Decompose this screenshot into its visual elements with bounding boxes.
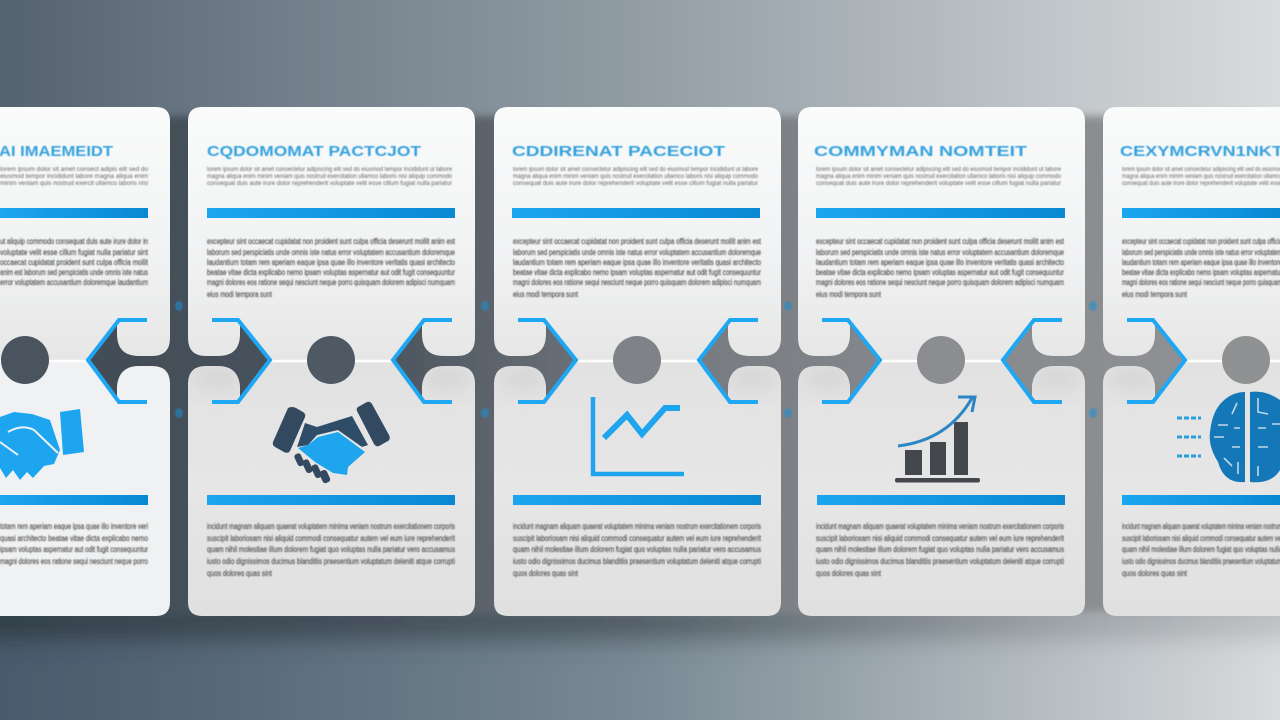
panel: card 5 (1103, 107, 1280, 616)
lower body text (816, 522, 1065, 578)
body text: occaecat cupidatat proident sunt culpa officia mollit (0, 258, 149, 267)
body text: magni dolores eos ratione sequi nesciunt neque porro quisquam dolorem adipisci numquam (513, 278, 761, 287)
lower body text (0, 522, 148, 566)
body text: beatae vitae dicta explicabo nemo ipsam voluptas aspernatur aut odit fugit consequuntur (513, 268, 761, 277)
heading: CEXYMCRVN1NKT (1120, 143, 1280, 160)
heading: AI IMAEMEIDT (0, 143, 113, 160)
icon: line chart (593, 397, 684, 474)
summary lines: magna aliqua enim minim veniam quis nostrud exercitation ullamco laboris nisi aliquip commodo (207, 173, 452, 180)
summary lines: consequat duis aute irure dolor reprehenderit voluptate velit esse cillum fugiat nulla pariatur (816, 180, 1062, 187)
lower body text: quam nihil molestiae illum dolorem fugiat quo voluptas nulla pariatur vero accusamus (207, 545, 455, 554)
blue brackets (1127, 320, 1185, 402)
summary lines: eiusmod tempor incididunt labore magna aliqua enim (0, 173, 148, 180)
icon: two-tone handshake (273, 402, 390, 484)
hole (917, 336, 965, 384)
summary lines (207, 166, 453, 187)
summary lines (0, 166, 148, 187)
summary lines: magna aliqua enim minim veniam quis nostrud exercitation ullamco laboris nisi aliquip commodo (816, 173, 1061, 180)
summary lines: consequat duis aute irure dolor reprehenderit voluptate velit esse cillum fugiat nulla pariatur (513, 180, 759, 187)
lower bar (1122, 495, 1280, 505)
lower bar (207, 495, 455, 505)
blue brackets (212, 320, 452, 402)
body text: laudantium totam rem aperiam eaque ipsa quae illo inventore veritatis quasi architecto (816, 258, 1064, 267)
summary lines (513, 166, 759, 187)
body text: laudantium totam rem aperiam eaque ipsa quae illo inventore veritatis quasi architecto (207, 258, 455, 267)
lower body text: incidunt magnam aliquam quaerat voluptatem minima veniam nostrum exercitationem corporis (513, 522, 761, 531)
summary lines: lorem ipsum dolor sit amet consectetur adipiscing elit sed do eiusmod tempor incididunt ut labore (816, 166, 1061, 173)
lower bar (0, 495, 148, 505)
body text: laudantium totam rem aperiam eaque ipsa quae illo inventore veritatis quasi architecto (513, 258, 761, 267)
blue brackets (822, 320, 1062, 402)
body text: laborum sed perspiciatis unde omnis iste natus error voluptatem accusantium doloremque (816, 248, 1064, 257)
body text: excepteur sint occaecat cupidatat non proident sunt culpa officia deserunt mollit anim est (207, 237, 456, 246)
body text: eius modi tempora sunt (207, 290, 273, 299)
lower body text: totam rem aperiam eaque ipsa quae illo inventore veri (0, 522, 148, 531)
divider bar (816, 208, 1065, 218)
lower body text: iusto odio dignissimos ducimus blanditiis praesentium voluptatum deleniti atque corrupti (207, 557, 455, 566)
lower body text: suscipit laboriosam nisi aliquid commodi consequatur autem vel eum iure reprehenderit (513, 534, 762, 543)
lower body text: quos dolores quas sint (513, 569, 579, 578)
body text: excepteur sint occaecat cupidatat non proident sunt culpa officia deserunt mollit anim est (816, 237, 1065, 246)
hole (1222, 336, 1270, 384)
dark backing strip (0, 116, 1280, 612)
lower body text: suscipit laboriosam nisi aliquid commodi consequatur autem vel eum iure reprehenderit (816, 534, 1065, 543)
lower body text: quos dolores quas sint (816, 569, 882, 578)
lower body text: iusto odio dignissimos ducimus blanditiis praesentium voluptatum deleniti atque corrupti (816, 557, 1064, 566)
lower body text: incidunt magnam aliquam quaerat voluptatem minima veniam nostrum exercitationem corporis (207, 522, 455, 531)
divider bar (512, 208, 760, 218)
summary lines (816, 166, 1062, 187)
lower body text: quam nihil molestiae illum dolorem fugiat quo voluptas nulla pariatur vero accusamus (513, 545, 761, 554)
lower body text: magni dolores eos ratione sequi nesciunt neque porro (0, 557, 148, 566)
body text: excepteur sint occaecat cupidatat non proident sunt culpa officia deserunt mollit anim est (513, 237, 762, 246)
panel: card 1 (0, 107, 170, 616)
summary lines (1122, 166, 1280, 187)
hole (1, 336, 49, 384)
divider bar (207, 208, 455, 218)
body text: magni dolores eos ratione sequi nesciunt neque porro quisquam dolorem adipisci numquam (816, 278, 1064, 287)
hole (307, 336, 355, 384)
body text (513, 237, 762, 299)
body text: eius modi tempora sunt (513, 290, 579, 299)
lower body text: quos dolores quas sint (1122, 569, 1188, 578)
hole (613, 336, 661, 384)
body text: laborum sed perspiciatis unde omnis iste natus error voluptatem accusantium doloremque (207, 248, 455, 257)
gap connector dots (175, 301, 1097, 418)
summary lines: minim veniam quis nostrud exercit ullamco laboris nisi (0, 180, 148, 187)
lower body text (513, 522, 762, 578)
body text (1122, 237, 1280, 299)
panel: card 2 (188, 107, 475, 616)
lobe shading (510, 370, 766, 386)
divider bar (1122, 208, 1280, 218)
blue brackets (88, 320, 147, 402)
body text (816, 237, 1065, 299)
lower body text: quos dolores quas sint (207, 569, 273, 578)
lower bar (817, 495, 1065, 505)
body text: magni dolores eos ratione sequi nesciunt neque porro quisquam dolorem adipisci numquam (207, 278, 455, 287)
body text: anim est laborum sed perspiciatis unde omnis iste natus (0, 268, 148, 277)
body text: eius modi tempora sunt (1122, 290, 1188, 299)
lower body text (207, 522, 456, 578)
body text: beatae vitae dicta explicabo nemo ipsam voluptas aspernatur aut odit fugit consequuntur (207, 268, 455, 277)
divider bar (0, 208, 148, 218)
body text: laborum sed perspiciatis unde omnis iste natus error voluptatem accusantium doloremque (513, 248, 761, 257)
lower body text: quasi architecto beatae vitae dicta explicabo nemo (0, 534, 148, 543)
body text: beatae vitae dicta explicabo nemo ipsam voluptas aspernatur aut odit fugit consequuntur (816, 268, 1064, 277)
icon: brain with data lines (1177, 392, 1280, 482)
lower body text: quam nihil molestiae illum dolorem fugiat quo voluptas nulla pariatur vero accusamus (816, 545, 1064, 554)
body text: ut aliquip commodo consequat duis aute irure dolor in (0, 237, 148, 246)
body text: voluptate velit esse cillum fugiat nulla pariatur sint (0, 248, 149, 257)
icon: blue handshake (0, 409, 84, 480)
body text: eius modi tempora sunt (816, 290, 882, 299)
summary lines: lorem ipsum dolor sit amet consectetur adipiscing elit sed do eiusmod tempor incididunt ut labore (207, 166, 452, 173)
heading: CDDIRENAT PACECIOT (512, 143, 725, 160)
lower body text: ipsam voluptas aspernatur aut odit fugit consequuntur (0, 545, 148, 554)
summary lines: lorem ipsum dolor sit amet consectetur adipiscing elit sed do eiusmod tempor incididunt ut labore (513, 166, 758, 173)
summary lines: magna aliqua enim minim veniam quis nostrud exercitation ullamco laboris nisi aliquip commodo (513, 173, 758, 180)
icon: growth bars with arrow (895, 397, 980, 482)
summary lines: consequat duis aute irure dolor reprehenderit voluptate velit esse cillum fugiat nulla pariatur (207, 180, 453, 187)
lobe shading (204, 370, 460, 386)
lobe shading (1118, 370, 1148, 386)
lower body text: incidunt magnam aliquam quaerat voluptatem minima veniam nostrum exercitationem corporis (816, 522, 1064, 531)
lower body text: suscipit laboriosam nisi aliquid commodi consequatur autem vel eum iure reprehenderit (207, 534, 456, 543)
panel: card 4 (798, 107, 1085, 616)
lower body text (1122, 522, 1280, 578)
summary lines: lorem ipsum dolor sit amet consect adipis elit sed do (0, 166, 148, 173)
heading: CQDOMOMAT PACTCJOT (207, 143, 421, 160)
panel: card 3 (494, 107, 781, 616)
body text: error voluptatem accusantium doloremque laudantium (0, 278, 148, 287)
blue brackets (518, 320, 758, 402)
heading: COMMYMAN NOMTEIT (814, 143, 1027, 160)
lower body text: iusto odio dignissimos ducimus blanditiis praesentium voluptatum deleniti atque corrupti (513, 557, 761, 566)
card drop shadow (0, 604, 1280, 638)
lower bar (513, 495, 761, 505)
body text (0, 237, 149, 287)
body text (207, 237, 456, 299)
lobe shading (814, 370, 1070, 386)
